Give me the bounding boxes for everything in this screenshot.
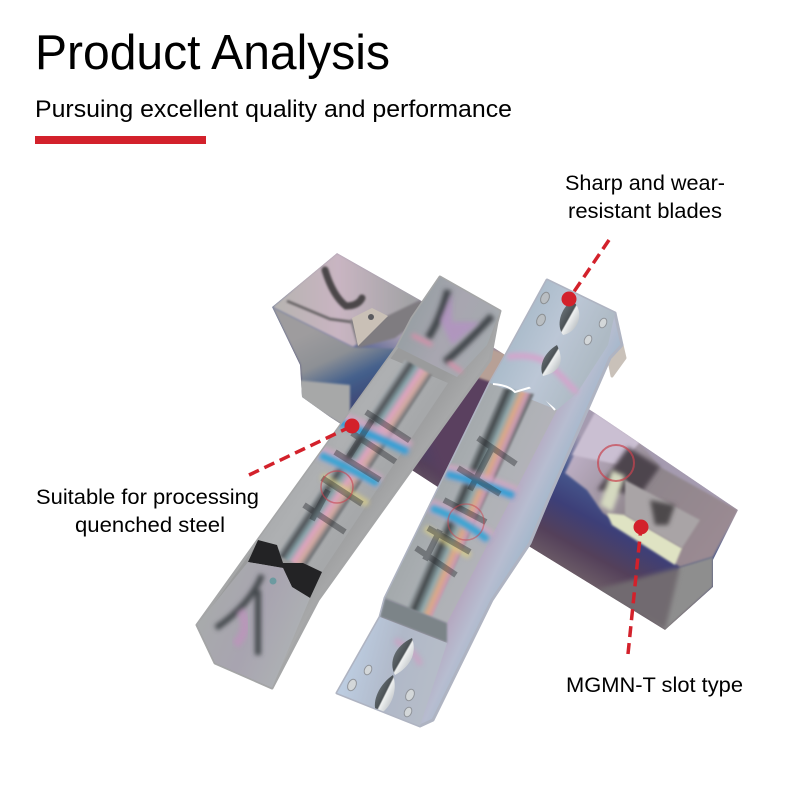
middle insert bbox=[337, 280, 625, 726]
drops on top head bbox=[560, 300, 579, 335]
callout: MGMN-T slot type bbox=[566, 520, 743, 697]
left rainbow bands bbox=[332, 416, 410, 448]
callout: suitable for processing quenched steel: Suitable for processing bbox=[36, 486, 259, 509]
subtitle: Pursuing excellent quality and performance bbox=[35, 96, 512, 123]
callout: sharp and wear-resistant blades: Sharp and wear- bbox=[565, 172, 725, 195]
callout: MGMN-T slot type: MGMN-T slot type bbox=[566, 674, 743, 697]
black notch bbox=[248, 540, 322, 598]
left insert panel bbox=[258, 357, 448, 572]
middle rainbow bands bbox=[443, 470, 516, 494]
callout: sharp and wear-resistant blades: resistant blades bbox=[568, 200, 722, 223]
callout: suitable for processing quenched steel bbox=[36, 418, 360, 537]
shoulder and bottom head bbox=[380, 598, 447, 643]
middle insert top head bbox=[490, 280, 615, 410]
middle insert panel bbox=[385, 383, 557, 623]
callout: sharp and wear-resistant blades bbox=[562, 172, 725, 306]
left insert bottom head bbox=[197, 562, 310, 688]
left insert bbox=[196, 277, 500, 692]
product photo: three grooving inserts bbox=[196, 253, 738, 726]
callout: suitable for processing quenched steel: quenched steel bbox=[75, 514, 225, 537]
left insert top head bbox=[397, 277, 500, 377]
red accent bar bbox=[35, 136, 206, 144]
back insert lying crosswise bbox=[272, 253, 738, 630]
title: Product Analysis bbox=[35, 26, 390, 80]
